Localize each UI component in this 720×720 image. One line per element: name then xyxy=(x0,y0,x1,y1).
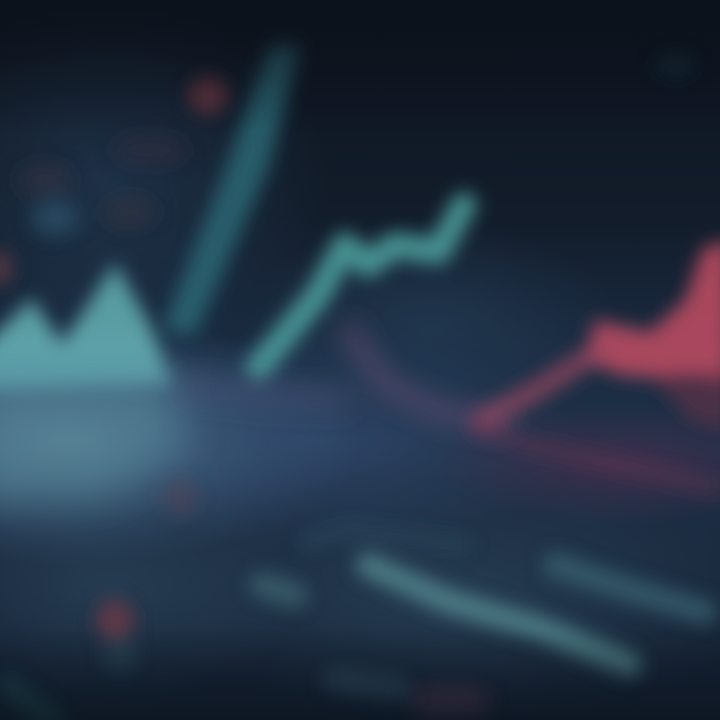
red rising line on the right xyxy=(470,240,720,488)
haze below the peaks xyxy=(0,370,190,500)
purple connecting line xyxy=(180,325,510,425)
teal peaks on the left xyxy=(0,262,172,392)
teal middle line xyxy=(258,205,464,368)
tall teal rising streak xyxy=(162,45,300,335)
streaks in the lower area xyxy=(0,530,705,720)
